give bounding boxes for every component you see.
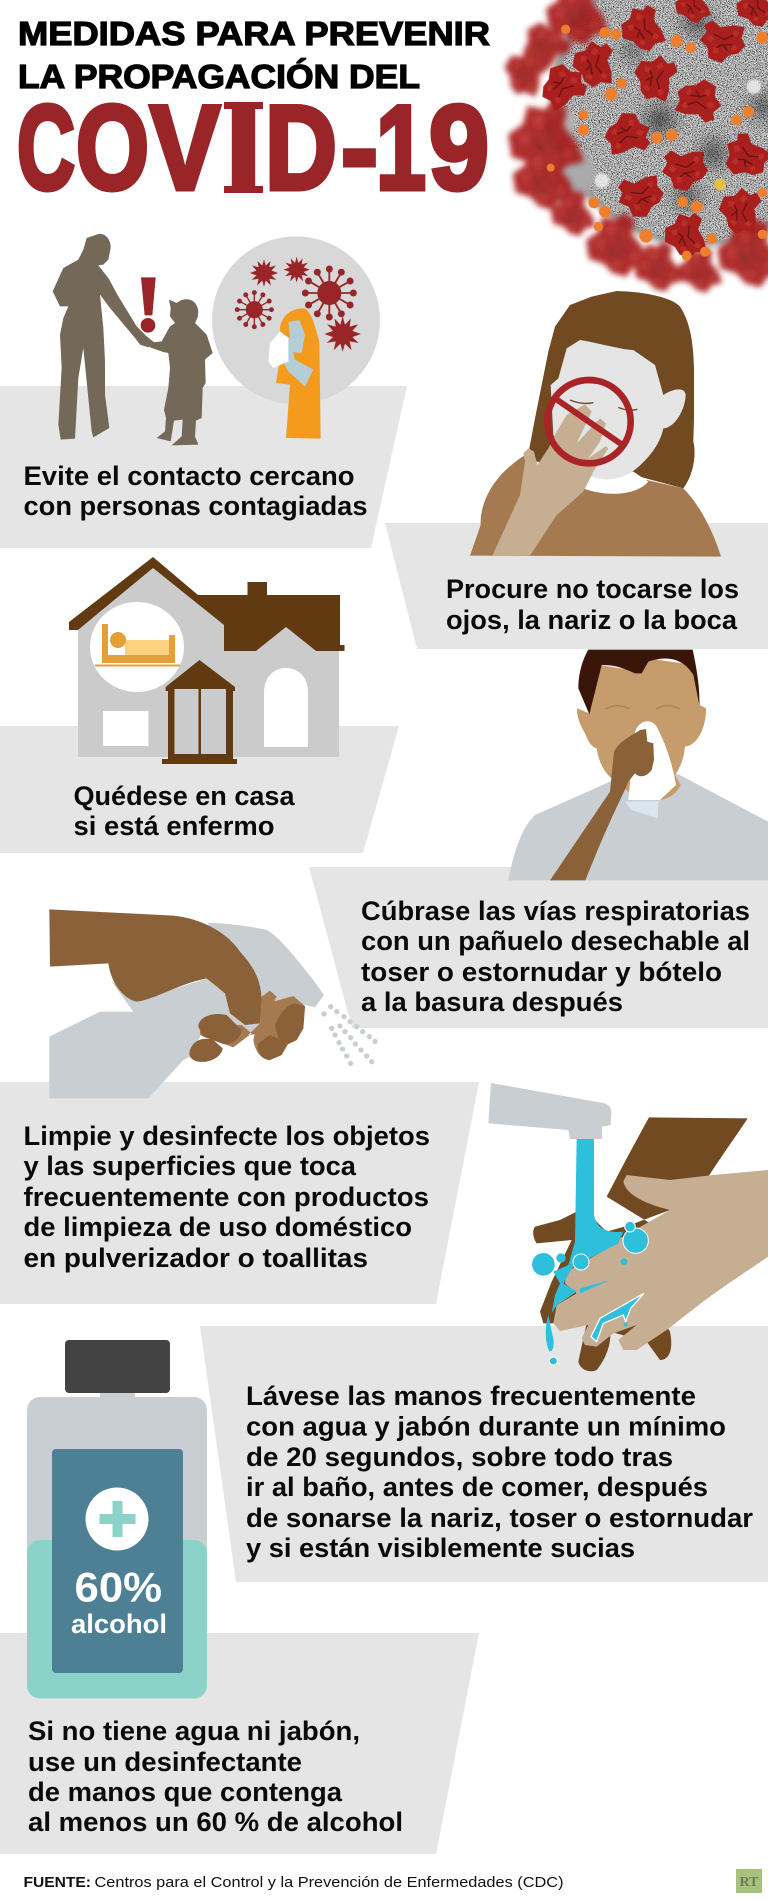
house round window [90,602,184,692]
source: Centros para el Control y la Prevención de Enfermedades (CDC) [94,1874,564,1891]
panel: cúbrase [309,867,768,1028]
text: cúbrase: Cúbrase las vías respiratorias [361,896,750,926]
house roof [69,557,344,651]
panel: no tocarse [385,523,768,649]
label text [71,1564,167,1639]
source: FUENTE: [24,1874,91,1891]
text: quédese [74,781,295,841]
text: cúbrase: a la basura después [361,987,623,1017]
text: lávese [246,1381,753,1563]
text: procure [446,574,739,635]
man shirt [508,773,768,880]
heading: COVID-19: - [341,81,378,215]
water stream [532,1139,648,1365]
heading lines [18,15,490,95]
text: cúbrase: toser o estornudar y bótelo [361,957,722,987]
man eyebrows [606,706,680,709]
illustration: sanitizer bottle [27,1340,207,1698]
hand [49,909,262,1025]
illustration: woman touching face [470,291,721,557]
text: evite: Evite el contacto cercano [24,461,354,491]
illustration: spray bottle [49,909,378,1098]
icon: prohibition sign [547,380,631,463]
panel: evite el contacto [0,386,407,548]
logo: RT: RT [740,1875,759,1890]
heading: COVID-19: 9 [429,81,489,215]
text: desinfectante: al menos un 60 % de alcohol [28,1807,403,1837]
bottle neck [100,1390,135,1400]
house door [162,660,237,764]
house arch window [264,668,308,747]
heading: COVID-19: 1 [376,81,426,215]
text: quédese: si está enfermo [74,811,274,841]
man collar [625,801,658,818]
icon: child silhouette [148,299,213,445]
virus spikes: sharp [537,0,768,261]
label text: 60% [74,1564,162,1610]
fingers [189,991,305,1062]
icon: exclamation mark [141,277,156,333]
light hand [553,1170,768,1350]
text: desinfectante: Si no tiene agua ni jabón, [28,1716,360,1746]
heading: COVID-19: V [150,81,220,215]
text: limpie: Limpie y desinfecte los objetos [24,1121,430,1151]
woman neck [583,472,648,494]
text: limpie: y las superficies que toca [24,1151,357,1181]
panel: desinfectante [0,1633,479,1854]
woman face [551,340,686,479]
virus orange dots [547,25,768,261]
text: limpie: frecuentemente con productos [24,1182,429,1212]
man head [577,658,706,800]
text: desinfectante: de manos que contenga [28,1777,343,1807]
spray bottle [49,923,324,1098]
text: quédese: Quédese en casa [74,781,295,811]
heading lines: LA PROPAGACIÓN DEL [18,58,420,95]
heading: COVID-19: D [265,81,337,215]
woman hand [492,404,608,556]
text: procure: ojos, la nariz o la boca [446,605,738,635]
faucet [488,1083,611,1139]
logo: RT [736,1869,762,1893]
text: limpie: de limpieza de uso doméstico [24,1212,412,1242]
text: lávese: ir al baño, antes de comer, después [246,1472,708,1502]
heading: COVID-19: I [226,81,261,215]
woman hair [529,291,695,488]
house body [78,568,339,757]
woman eyelashes [570,400,637,410]
icon: adult silhouette [53,234,155,440]
text: lávese: de sonarse la nariz, toser o estornudar [246,1503,753,1533]
text: limpie [24,1121,430,1273]
illustration: man sneezing [508,650,768,880]
heading lines: MEDIDAS PARA PREVENIR [18,15,490,52]
bottle label [52,1449,183,1673]
heading: COVID-19: O [76,81,149,215]
icon: grey circle [212,236,380,404]
dark hand [533,1117,748,1371]
text: cúbrase [361,896,750,1017]
virus image [495,0,768,293]
title [17,15,490,215]
icon: plus circle [86,1488,148,1550]
text: cúbrase: con un pañuelo desechable al [361,926,750,956]
text: procure: Procure no tocarse los [446,574,739,604]
text: desinfectante: use un desinfectante [28,1747,302,1777]
bottle body [27,1397,207,1617]
man arm and hand [550,729,654,880]
text: lávese: de 20 segundos, sobre todo tras [246,1442,673,1472]
illustration: contact [53,234,380,445]
text: desinfectante [28,1716,403,1837]
virus sphere [545,0,768,247]
icon: sick girl [268,309,321,439]
woman sweater [470,455,721,557]
text: lávese: con agua y jabón durante un mínimo [246,1412,726,1442]
text: limpie: en pulverizador o toallitas [24,1243,368,1273]
text: evite [24,461,368,521]
heading: COVID-19: C [17,81,75,215]
virus spikes: blurred [495,0,768,293]
text: lávese: Lávese las manos frecuentemente [246,1381,696,1411]
panel: quédese en casa [0,726,399,853]
house square window [103,711,148,746]
man hair [578,650,699,714]
panel: lávese las manos [200,1326,768,1582]
bottle cap [65,1340,170,1393]
heading: COVID-19 [17,81,489,215]
spray droplets [321,1004,378,1066]
text: lávese: y si están visiblemente sucias [246,1533,635,1563]
icon: viruses [235,257,361,352]
icon: bed [95,624,180,666]
man tissue [628,721,676,800]
text: evite: con personas contagiadas [24,491,368,521]
bottle liquid [27,1540,207,1698]
label text: alcohol [71,1609,167,1639]
panel: limpie y desinfecte [0,1082,479,1304]
illustration: house [69,557,344,764]
illustration: hand washing [488,1083,768,1371]
